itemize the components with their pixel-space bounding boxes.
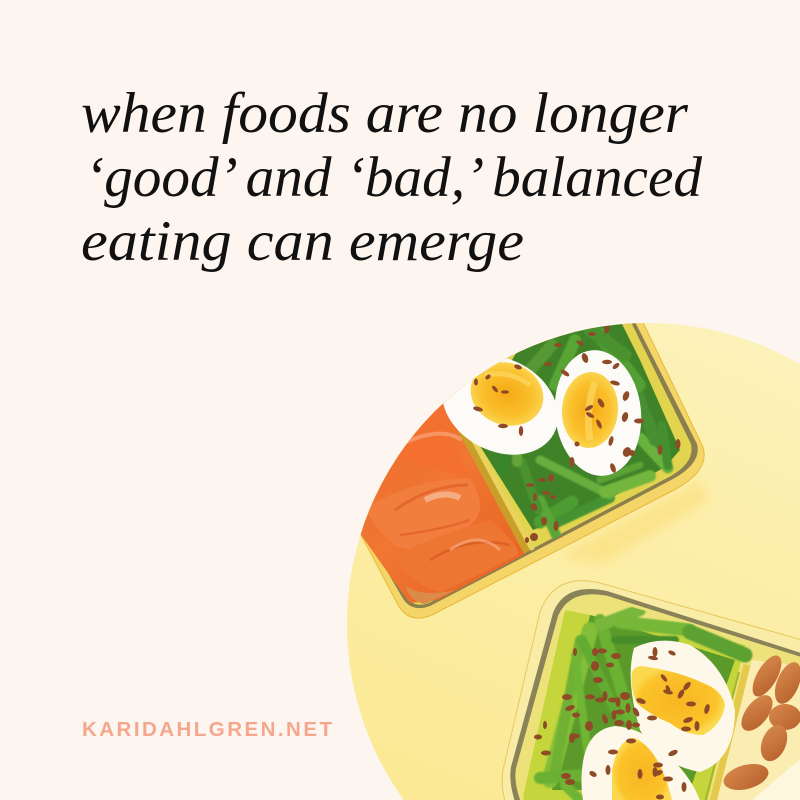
website credit: KARIDAHLGREN.NET: [82, 718, 332, 741]
meal container: asparagus, eggs and almonds: [502, 581, 800, 800]
container shadow: [560, 480, 710, 565]
almond compartment: [708, 660, 800, 800]
almond compartment cheese: [752, 759, 800, 800]
soft egg upper: [631, 641, 735, 772]
container contents: [520, 610, 800, 800]
title: [81, 82, 702, 273]
glass rim: [360, 323, 705, 619]
flax seeds: [534, 647, 711, 800]
title: ‘good’ and ‘bad,’ balanced: [85, 146, 702, 209]
meal container: salmon, asparagus and eggs: [360, 323, 711, 619]
boiled egg right: [555, 350, 642, 476]
salmon compartment: [360, 402, 525, 604]
compartment divider: [441, 392, 527, 552]
almonds: [721, 651, 800, 795]
title: eating can emerge: [81, 210, 524, 273]
boiled egg left: [443, 358, 557, 455]
yellow circle backdrop: [340, 320, 800, 800]
glass rim: [502, 581, 800, 800]
container contents: [340, 320, 680, 604]
infographic canvas: [82, 92, 800, 800]
compartment divider: [711, 665, 747, 800]
soft egg lower: [581, 726, 703, 800]
asparagus compartment: [520, 610, 745, 800]
circular food photo: [340, 300, 800, 800]
asparagus compartment: [470, 320, 680, 535]
flax seeds: [473, 324, 680, 543]
title: when foods are no longer: [81, 82, 689, 145]
